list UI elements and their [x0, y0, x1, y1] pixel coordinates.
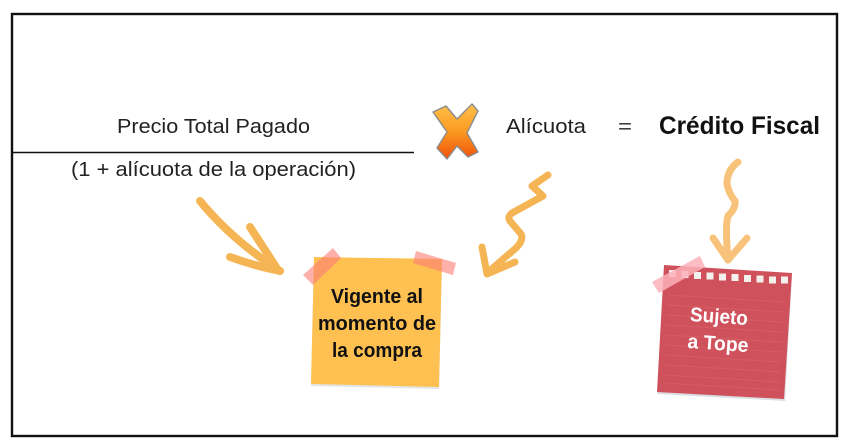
equals sign: =	[618, 117, 632, 138]
red note text	[687, 304, 749, 357]
tape: red note	[652, 256, 705, 293]
fraction line	[12, 152, 414, 154]
note: orange sticky note	[303, 248, 456, 389]
tape: left	[303, 248, 341, 285]
arrow: from alícuota to orange note	[482, 175, 548, 274]
note text: Vigente al	[331, 286, 423, 308]
note text	[318, 286, 436, 362]
red note text: a Tope	[687, 331, 749, 357]
result: crédito fiscal: Crédito Fiscal	[659, 112, 820, 140]
note text: la compra	[332, 340, 423, 362]
arrow: from denominator to orange note	[200, 201, 280, 271]
note: red notepad sheet	[652, 256, 792, 401]
label: alícuota: Alícuota	[506, 116, 587, 138]
red note text: Sujeto	[689, 304, 749, 330]
formula denominator: alícuota de la operación: (1 + alícuota de la operación)	[71, 159, 356, 181]
tape: right	[413, 251, 456, 275]
icon: multiplication cross	[433, 104, 478, 159]
arrow: from crédito fiscal to red note	[713, 162, 747, 260]
notepad holes	[669, 270, 788, 284]
formula numerator: precio total pagado: Precio Total Pagado	[117, 116, 310, 138]
note text: momento de	[318, 313, 436, 335]
